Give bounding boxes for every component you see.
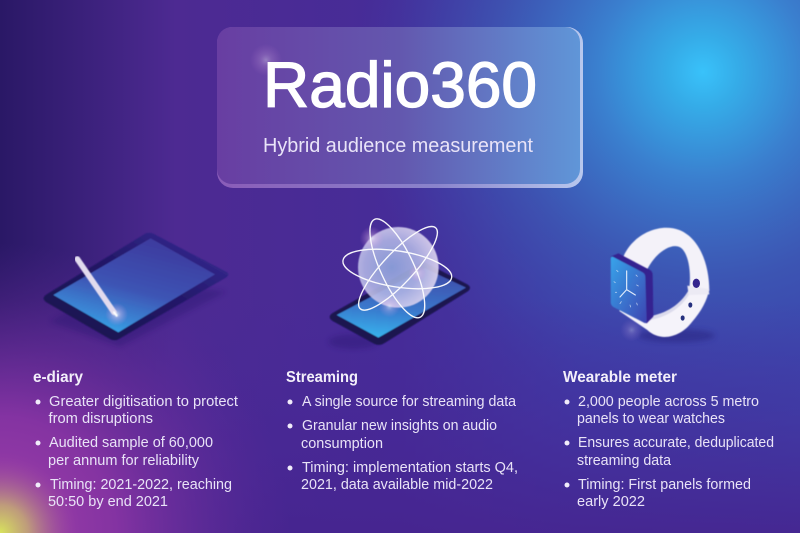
bullet list: wearable meter: streaming data	[577, 452, 672, 469]
stylus	[77, 259, 117, 316]
bullet list: streaming: Granular new insights on audio	[302, 417, 497, 434]
bullet list: e-diary: 50:50 by end 2021	[48, 493, 168, 510]
subtitle: Hybrid audience measurement	[263, 134, 533, 157]
text block: streaming	[286, 369, 518, 493]
bullet list: streaming: 2021, data available mid-2022	[301, 476, 493, 493]
bullet list: e-diary: Timing: 2021-2022, reaching	[50, 476, 232, 493]
watch hands and ticks	[614, 270, 638, 307]
bullet list: wearable meter: early 2022	[577, 493, 645, 510]
panel: title glass card	[217, 27, 583, 188]
bullet list: wearable meter: Timing: First panels formed	[578, 476, 751, 493]
bullet list: wearable meter: Ensures accurate, deduplicated	[578, 434, 774, 451]
bullet list: wearable meter: 2,000 people across 5 metro	[578, 393, 759, 410]
bullet list: streaming	[288, 393, 518, 493]
text block: e-diary	[33, 369, 239, 510]
bullet list: e-diary: from disruptions	[48, 410, 153, 427]
case	[611, 253, 653, 323]
sphere	[358, 227, 439, 308]
heading: e-diary: e-diary	[33, 369, 83, 386]
bullet list: e-diary: Greater digitisation to protect	[49, 393, 239, 410]
title: Radio360	[263, 49, 537, 121]
strap	[619, 228, 709, 337]
bullet list: streaming: consumption	[301, 435, 383, 452]
heading: streaming: Streaming	[286, 369, 358, 386]
orbits	[340, 212, 454, 324]
bullet list: e-diary	[36, 393, 239, 510]
bullet list: e-diary: per annum for reliability	[48, 452, 199, 469]
bullet list: wearable meter: panels to wear watches	[577, 410, 725, 427]
icon: wearable watch	[611, 228, 715, 342]
bullet list: streaming: Timing: implementation starts Q4,	[302, 459, 518, 476]
text block: wearable meter	[563, 369, 774, 510]
icon: phone with orbit sphere	[328, 212, 470, 349]
bullet list: e-diary: Audited sample of 60,000	[49, 434, 213, 451]
icon: tablet with stylus	[44, 233, 228, 347]
bullet list: streaming: A single source for streaming data	[302, 393, 517, 410]
heading: wearable meter: Wearable meter	[563, 369, 677, 386]
bullet list: wearable meter	[564, 393, 774, 510]
